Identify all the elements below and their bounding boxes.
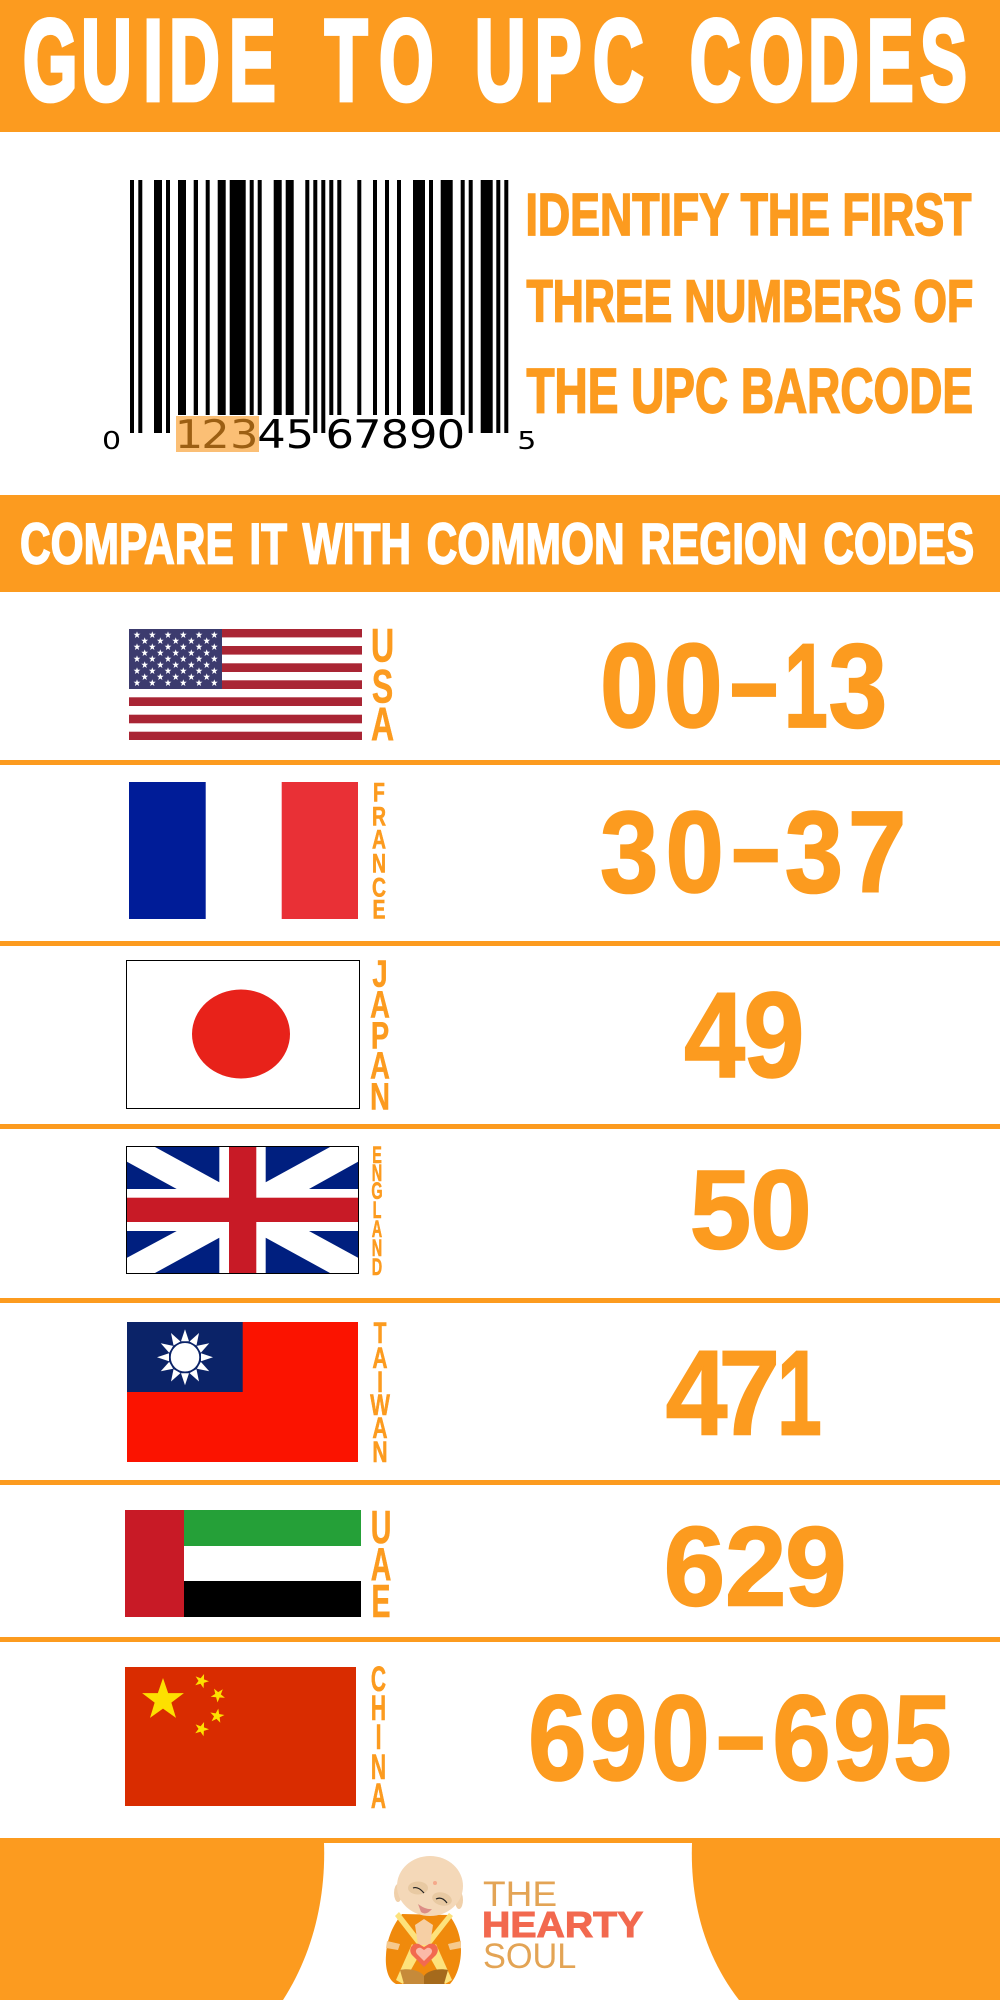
barcode digits	[102, 412, 536, 457]
barcode digits: 0	[102, 425, 121, 455]
row: Japan	[126, 953, 805, 1119]
row: Taiwan	[127, 1318, 822, 1469]
logo text: HEARTY	[482, 1904, 643, 1945]
code: 00-13	[600, 616, 887, 753]
code: 30-37: –	[732, 781, 780, 914]
logo text: THE	[483, 1874, 557, 1914]
row: France	[129, 777, 906, 924]
label: France: FRANCE	[372, 777, 386, 924]
flag: France	[129, 782, 358, 919]
barcode digits: 67890	[325, 412, 465, 457]
logo text: SOUL	[483, 1938, 576, 1976]
code: 00-13: 1	[784, 620, 828, 753]
flag: Taiwan	[127, 1322, 358, 1462]
title: GUIDE TO UPC CODES	[23, 0, 967, 125]
flag: USA	[129, 629, 362, 740]
flag: Japan	[126, 960, 360, 1108]
code: 471: 1	[777, 1325, 822, 1460]
label: USA: USA	[371, 619, 394, 751]
row: USA	[129, 616, 887, 753]
code: 00-13: 3	[828, 619, 887, 752]
flag: UAE	[125, 1510, 361, 1617]
logo text	[482, 1874, 643, 1976]
code: 49: 49	[684, 967, 805, 1103]
instruction text: IDENTIFY THE FIRST	[526, 183, 971, 249]
code: 471: 47	[666, 1325, 780, 1461]
code: 50: 50	[690, 1147, 812, 1273]
barcode digits: 45	[257, 412, 314, 457]
footer corner right	[692, 1843, 1000, 2000]
icon: monk mascot	[386, 1856, 463, 1984]
label: England: ENGLAND	[371, 1142, 383, 1281]
row: China	[125, 1661, 952, 1816]
barcode digits: 123	[175, 412, 259, 457]
code: 690-695: 690	[528, 1671, 710, 1807]
long guard bars	[130, 180, 508, 433]
highlight of first three digits	[176, 416, 259, 452]
code: 629: 629	[664, 1504, 847, 1630]
short bars	[178, 180, 465, 415]
code: 690-695	[528, 1669, 952, 1807]
code: 00-13: 00	[600, 619, 723, 752]
title banner	[0, 0, 1000, 132]
footer corner left	[0, 1843, 324, 2000]
label: Japan: JAPAN	[370, 953, 390, 1119]
compare heading: COMPARE IT WITH COMMON REGION CODES	[20, 511, 974, 576]
instruction text: THREE NUMBERS OF	[526, 268, 973, 334]
instruction text: THE UPC BARCODE	[526, 355, 973, 426]
code: 30-37: 37	[785, 788, 906, 917]
compare banner	[0, 495, 1000, 592]
instruction text	[526, 183, 973, 426]
label: Taiwan: TAIWAN	[370, 1318, 390, 1469]
code: 30-37	[600, 781, 906, 917]
code: 00-13: –	[730, 616, 778, 748]
footer	[0, 1843, 1000, 2000]
flag: China	[125, 1667, 356, 1806]
row: UAE	[125, 1502, 847, 1630]
barcode digits: 5	[517, 425, 536, 455]
label: China: CHINA	[371, 1661, 386, 1816]
code: 690-695: 695	[772, 1671, 952, 1807]
code: 690-695: –	[717, 1669, 765, 1801]
code: 30-37: 30	[600, 788, 724, 917]
row: England	[126, 1142, 812, 1281]
barcode	[102, 180, 536, 457]
flag: England	[126, 1146, 358, 1274]
label: UAE: UAE	[371, 1502, 391, 1628]
